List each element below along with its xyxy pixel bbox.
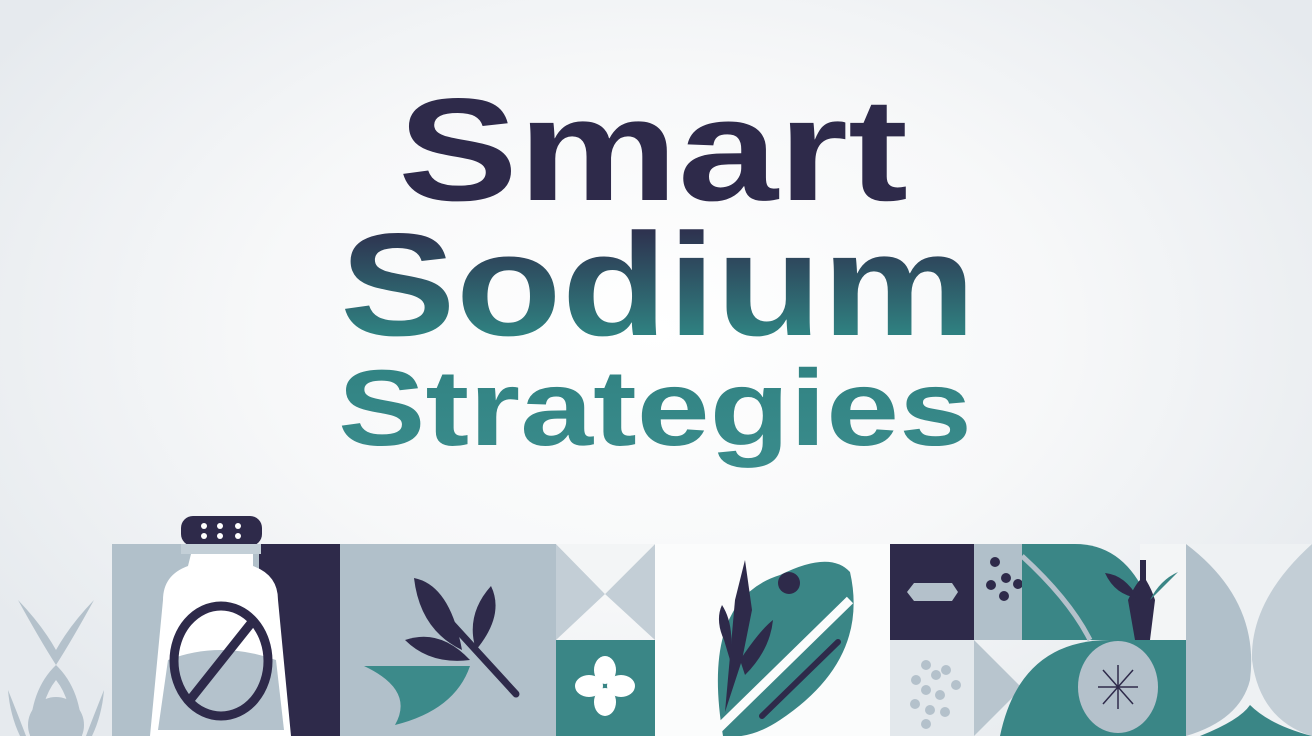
title line: Strategies: Strategies: [338, 347, 972, 468]
panel: herb sprig: [340, 544, 556, 736]
panel: triangles and clover: [556, 544, 655, 736]
panel: right circles: [1186, 544, 1312, 736]
icon: left sprout: [8, 600, 104, 736]
panel: salt shaker: [112, 516, 340, 736]
icon: shaker body: [150, 554, 291, 736]
icon: bottle: [1128, 560, 1155, 640]
title line: Sodium: Sodium: [340, 203, 976, 366]
title line: Smart: Smart: [398, 68, 908, 231]
panel: crossed leaf: [655, 544, 890, 736]
icon: navy branch: [430, 600, 516, 694]
icon: hexagon: [907, 583, 958, 601]
panel: mosaic: [890, 544, 1186, 736]
icon: shaker cap: [181, 516, 262, 546]
icon: clover: [575, 656, 635, 716]
title: [338, 68, 976, 468]
icon: teal plant shape: [1022, 544, 1160, 640]
icon: sliced citrus: [1078, 641, 1158, 733]
icon: no symbol: [174, 606, 268, 716]
icon: teal leaves: [364, 666, 470, 725]
